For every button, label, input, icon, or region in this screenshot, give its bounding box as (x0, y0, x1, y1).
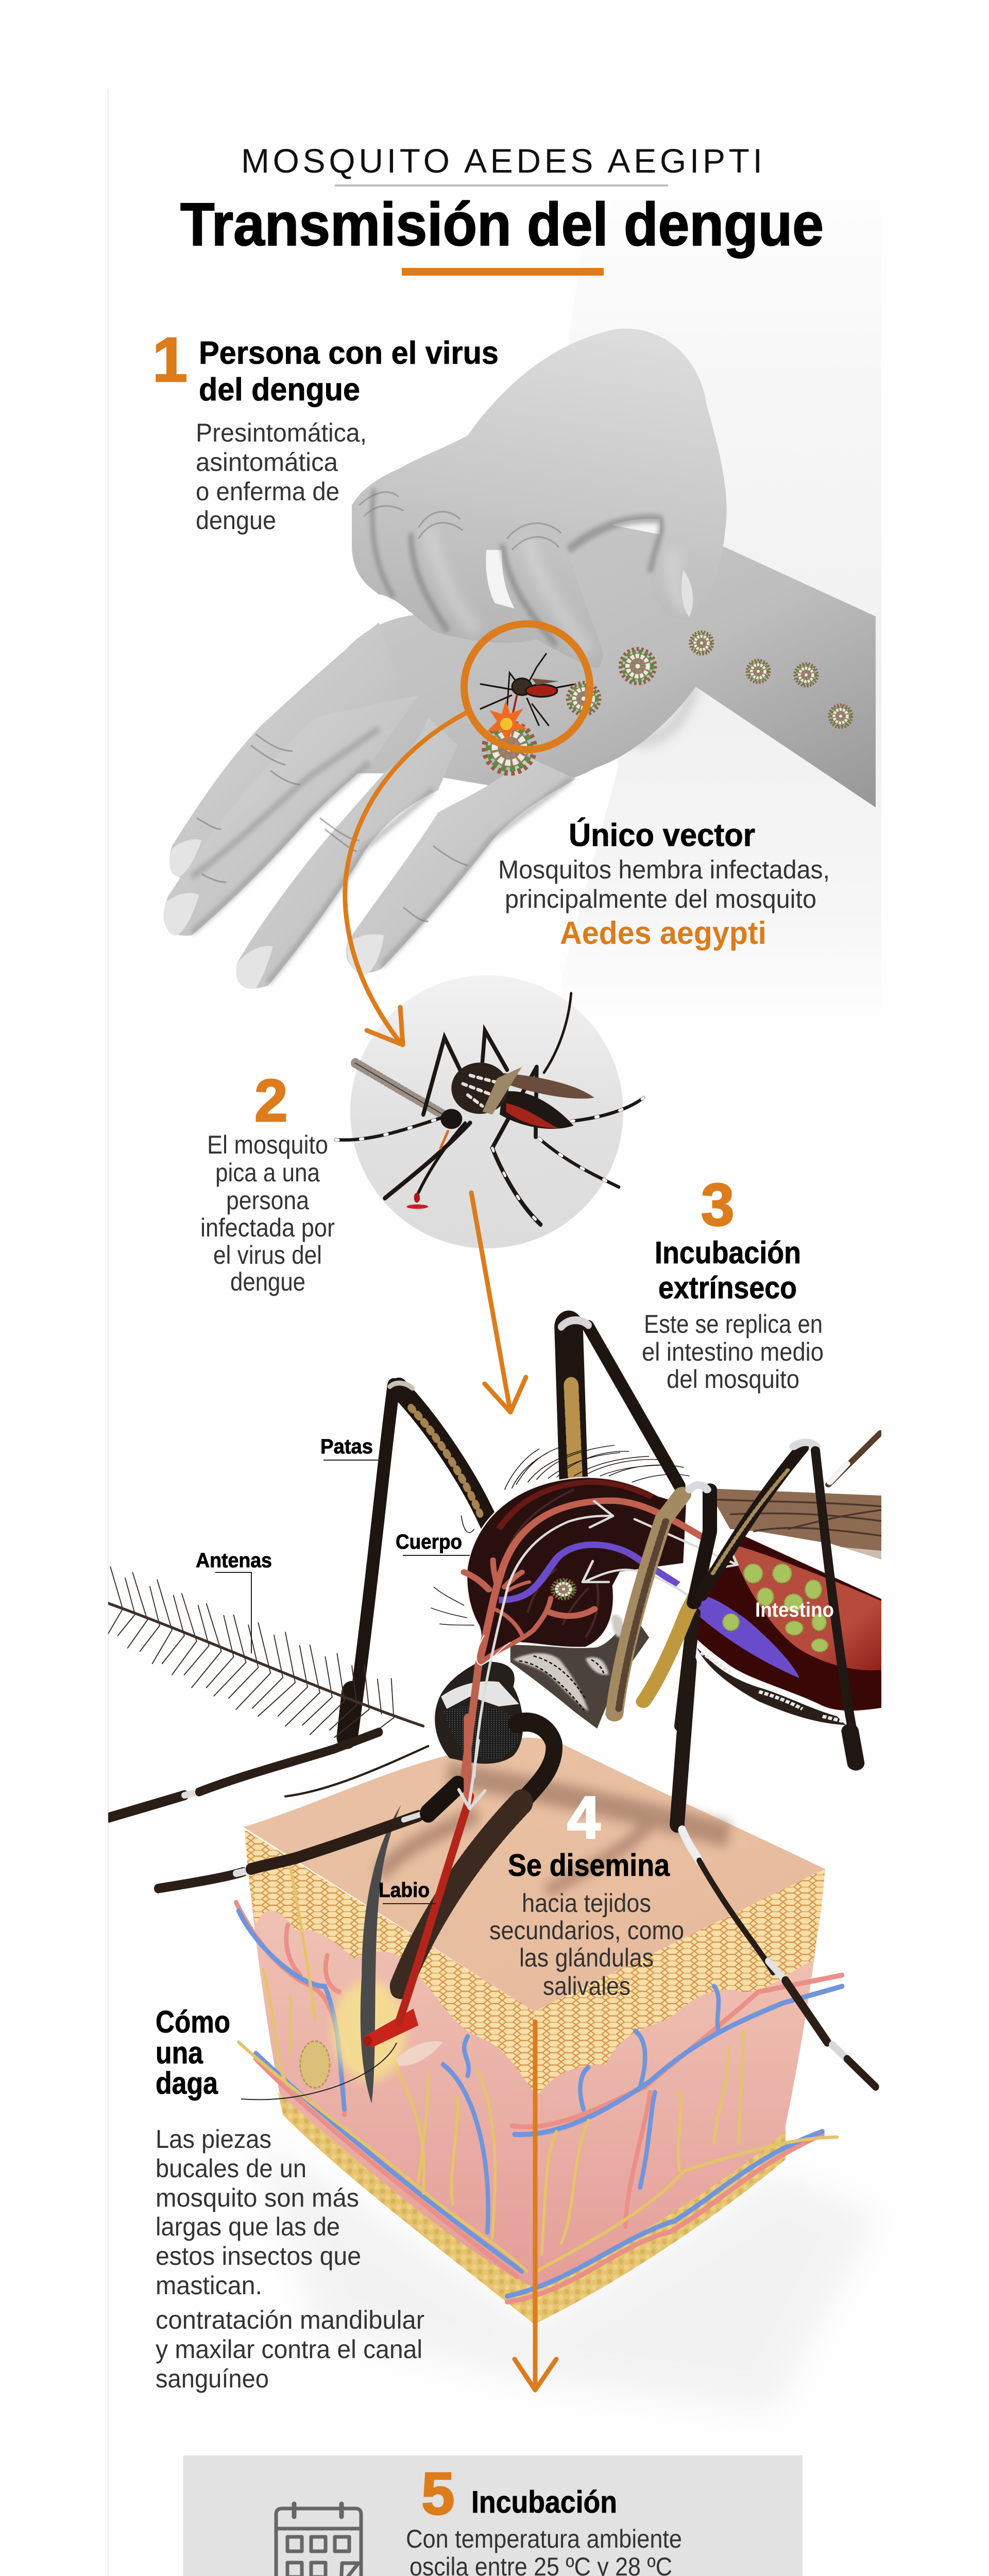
step 3 text: el intestino medio (642, 1337, 824, 1366)
hand shadow (620, 684, 694, 740)
panel: incubation: Con temperatura ambiente (406, 2524, 682, 2553)
step 2 text: infectada por (200, 1213, 335, 1242)
step 2 text: pica a una (215, 1158, 320, 1187)
step 1 text: del dengue (199, 372, 360, 408)
step 2 text: el virus del (213, 1241, 322, 1269)
step 2 text: El mosquito (207, 1130, 328, 1159)
unique vector text: Aedes aegypti (560, 916, 766, 951)
dagger text: daga (156, 2066, 218, 2100)
label: Cuerpo: Cuerpo (396, 1531, 462, 1553)
fat layer (278, 2092, 534, 2324)
neck and head (435, 1662, 523, 1764)
abdomen (687, 1532, 886, 1711)
mosquito shadows on skin (379, 1774, 729, 1891)
unique vector text: Mosquitos hembra infectadas, (498, 855, 830, 884)
step 2 text: dengue (230, 1267, 305, 1296)
labels on mosquito (196, 1435, 834, 1653)
title (180, 142, 824, 276)
kicker: MOSQUITO AEDES AEGIPTI (241, 142, 762, 180)
red labium tip in skin (363, 2009, 418, 2048)
step 4 text: hacia tejidos (522, 1889, 651, 1918)
infected cells (723, 1564, 828, 1652)
bite burst (487, 700, 527, 742)
dagger text: mastican. (156, 2271, 262, 2300)
panel: incubation: Incubación (471, 2485, 617, 2519)
step 2 text: 2 (254, 1067, 288, 1134)
dagger text: mosquito son más (156, 2183, 359, 2212)
step 3 text (642, 1171, 824, 1394)
lower legs (109, 1663, 876, 2087)
arrow: mosquito to incubation (471, 1193, 526, 1412)
epidermis left (245, 1830, 534, 2092)
body cutaway (431, 1445, 886, 1777)
wing (717, 1489, 881, 1560)
wing (497, 1073, 594, 1098)
dagger text: una (156, 2036, 203, 2070)
icon: biting mosquito (336, 993, 643, 1225)
thumbnail (681, 569, 693, 617)
finger nails (164, 839, 384, 989)
panel: incubation (183, 2455, 803, 2576)
dagger text: largas que las de (156, 2212, 340, 2241)
lower hand and forearm (164, 522, 876, 989)
front legs (615, 1433, 880, 1763)
step 1 text: Persona con el virus (199, 335, 499, 371)
step 4 text (489, 1784, 684, 2001)
proboscis (418, 1123, 465, 1193)
vessels (236, 1852, 842, 2302)
intestine purple (692, 1595, 799, 1678)
right face dermis (534, 1869, 825, 2321)
dagger text: y maxilar contra el canal (156, 2335, 422, 2364)
gaps and finger shading (486, 550, 515, 608)
dagger text: contratación mandibular (156, 2306, 424, 2334)
antenna (108, 1567, 423, 1740)
page left rule (108, 89, 109, 2576)
step 1 text: asintomática (196, 448, 338, 477)
label: Patas: Patas (320, 1435, 373, 1458)
front hairy leg (399, 1722, 554, 1989)
background sleeve panel (561, 155, 881, 1041)
orange highlight circle (464, 624, 590, 750)
hair follicle glow (332, 1981, 406, 2081)
label: Antenas: Antenas (196, 1549, 272, 1572)
label: Labio: Labio (379, 1879, 430, 1902)
dagger text: estos insectos que (156, 2242, 361, 2270)
epidermis right (534, 1869, 825, 2094)
antenna (355, 1063, 443, 1114)
icon: calendar (276, 2504, 361, 2576)
labium (399, 1797, 470, 2023)
arrow: bite to mosquito (345, 712, 468, 1045)
step 1 text: o enferma de (196, 477, 339, 506)
label: Antenas (196, 1549, 272, 1653)
top of skin (244, 1738, 825, 2011)
headline: Transmisión del dengue (180, 191, 824, 259)
muscle (396, 2041, 443, 2066)
red tube system (464, 1501, 701, 1777)
step 4 text: Se disemina (508, 1848, 670, 1883)
arrow: skin downward (515, 2022, 556, 2390)
flow arrows (474, 1501, 737, 1777)
upper hand scratching (352, 329, 727, 668)
step 1 text: Presintomática, (196, 418, 367, 447)
left face dermis (245, 1830, 534, 2321)
back legs (108, 1320, 679, 1740)
thorax (467, 1477, 687, 1665)
big mosquito (108, 1320, 886, 2087)
virus particles (485, 632, 852, 773)
step 1 text (152, 325, 499, 535)
dagger text: sanguíneo (156, 2364, 269, 2393)
skin cube (236, 1738, 842, 2324)
cube shadow (258, 2138, 876, 2411)
step 3 text: Incubación (655, 1235, 801, 1270)
step 3 text: Este se replica en (644, 1310, 823, 1338)
step 4 text: las glándulas (519, 1943, 654, 1972)
abdomen underside hair (697, 1647, 846, 1725)
finger shading (192, 728, 571, 983)
legs (336, 993, 643, 1225)
hair tufts (431, 1445, 690, 1625)
unique vector text (498, 818, 830, 951)
gland (300, 2041, 330, 2088)
knuckle creases (197, 734, 468, 921)
unique vector text: Único vector (569, 818, 755, 853)
dagger text: Cómo (156, 2005, 230, 2039)
label: Intestino: Intestino (755, 1599, 834, 1621)
underside patches (510, 1613, 649, 1728)
abdomen (500, 1091, 574, 1129)
virus in thorax (552, 1579, 575, 1599)
step 3 text: 3 (701, 1171, 735, 1238)
dagger text (156, 2005, 424, 2393)
dagger text: bucales de un (156, 2154, 306, 2183)
panel: incubation: 5 (421, 2460, 455, 2527)
step 1 text: dengue (196, 506, 276, 535)
small mosquito on hand (480, 653, 576, 726)
left patas leg (347, 1327, 679, 1737)
step 4 text: 4 (567, 1784, 601, 1851)
step 3 text: del mosquito (667, 1365, 799, 1394)
step 2 text: persona (226, 1186, 309, 1215)
unique vector text: principalmente del mosquito (505, 885, 816, 913)
thorax and head (451, 1062, 508, 1114)
step 2 text (200, 1067, 335, 1296)
blood drop (414, 1193, 420, 1203)
step 4 text: secundarios, como (489, 1916, 684, 1945)
hair (361, 1805, 401, 2104)
centre edge (534, 2011, 535, 2321)
dagger text: Las piezas (156, 2125, 271, 2154)
step 3 text: extrínseco (658, 1270, 797, 1305)
grey circle behind mosquito (350, 975, 623, 1248)
step 1 text: 1 (152, 325, 187, 395)
step 4 text: salivales (543, 1972, 630, 2001)
illustration: hands with virus particles (164, 329, 876, 989)
